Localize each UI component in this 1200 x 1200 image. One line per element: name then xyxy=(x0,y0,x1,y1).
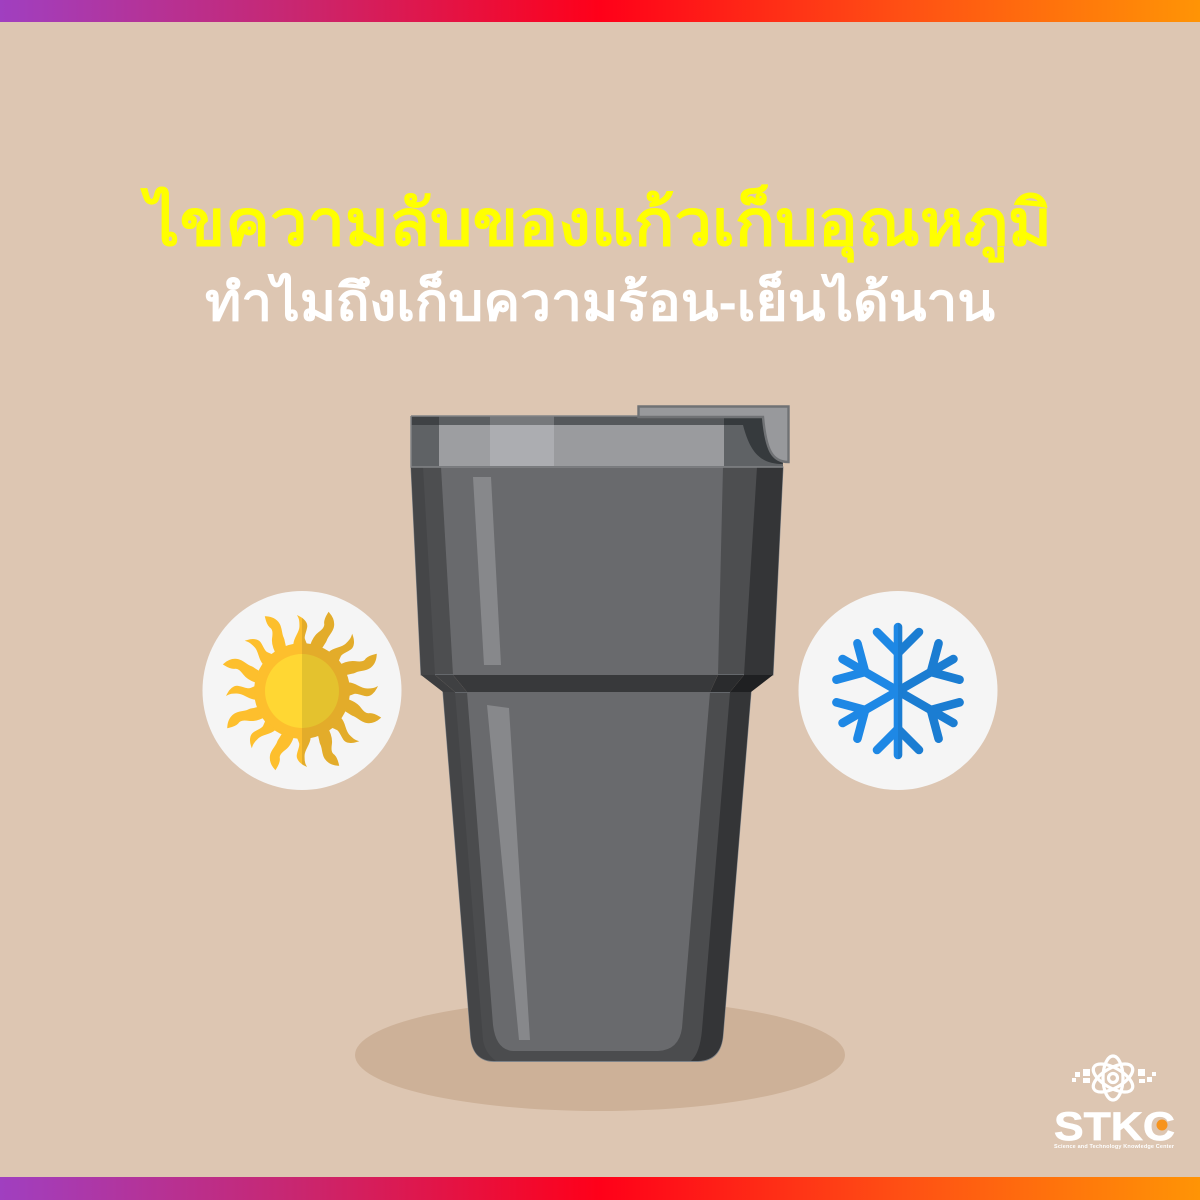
cup lower body xyxy=(443,692,751,1062)
subtitle: ทำไมถึงเก็บความร้อน-เย็นได้นาน xyxy=(205,271,995,332)
cup lid xyxy=(411,416,783,467)
cup shadow xyxy=(355,999,845,1111)
STKC logo xyxy=(1054,1056,1175,1150)
logo tagline: Science and Technology Knowledge Center xyxy=(1054,1144,1175,1150)
cup neck xyxy=(421,675,773,692)
tumbler cup xyxy=(411,406,788,1062)
logo pixels xyxy=(1072,1069,1156,1083)
icon: sun in circle xyxy=(202,591,402,790)
lid tab xyxy=(638,406,788,462)
logo atom mark xyxy=(1089,1056,1137,1100)
icon: snowflake in circle xyxy=(798,591,998,790)
logo wordmark: STKC xyxy=(1054,1105,1175,1149)
cup upper body xyxy=(411,467,783,675)
title: ไขความลับของแก้วเก็บอุณหภูมิ xyxy=(140,185,1052,263)
bottom gradient bar xyxy=(0,1177,1200,1200)
logo orange dot xyxy=(1156,1120,1168,1130)
top gradient bar xyxy=(0,0,1200,22)
